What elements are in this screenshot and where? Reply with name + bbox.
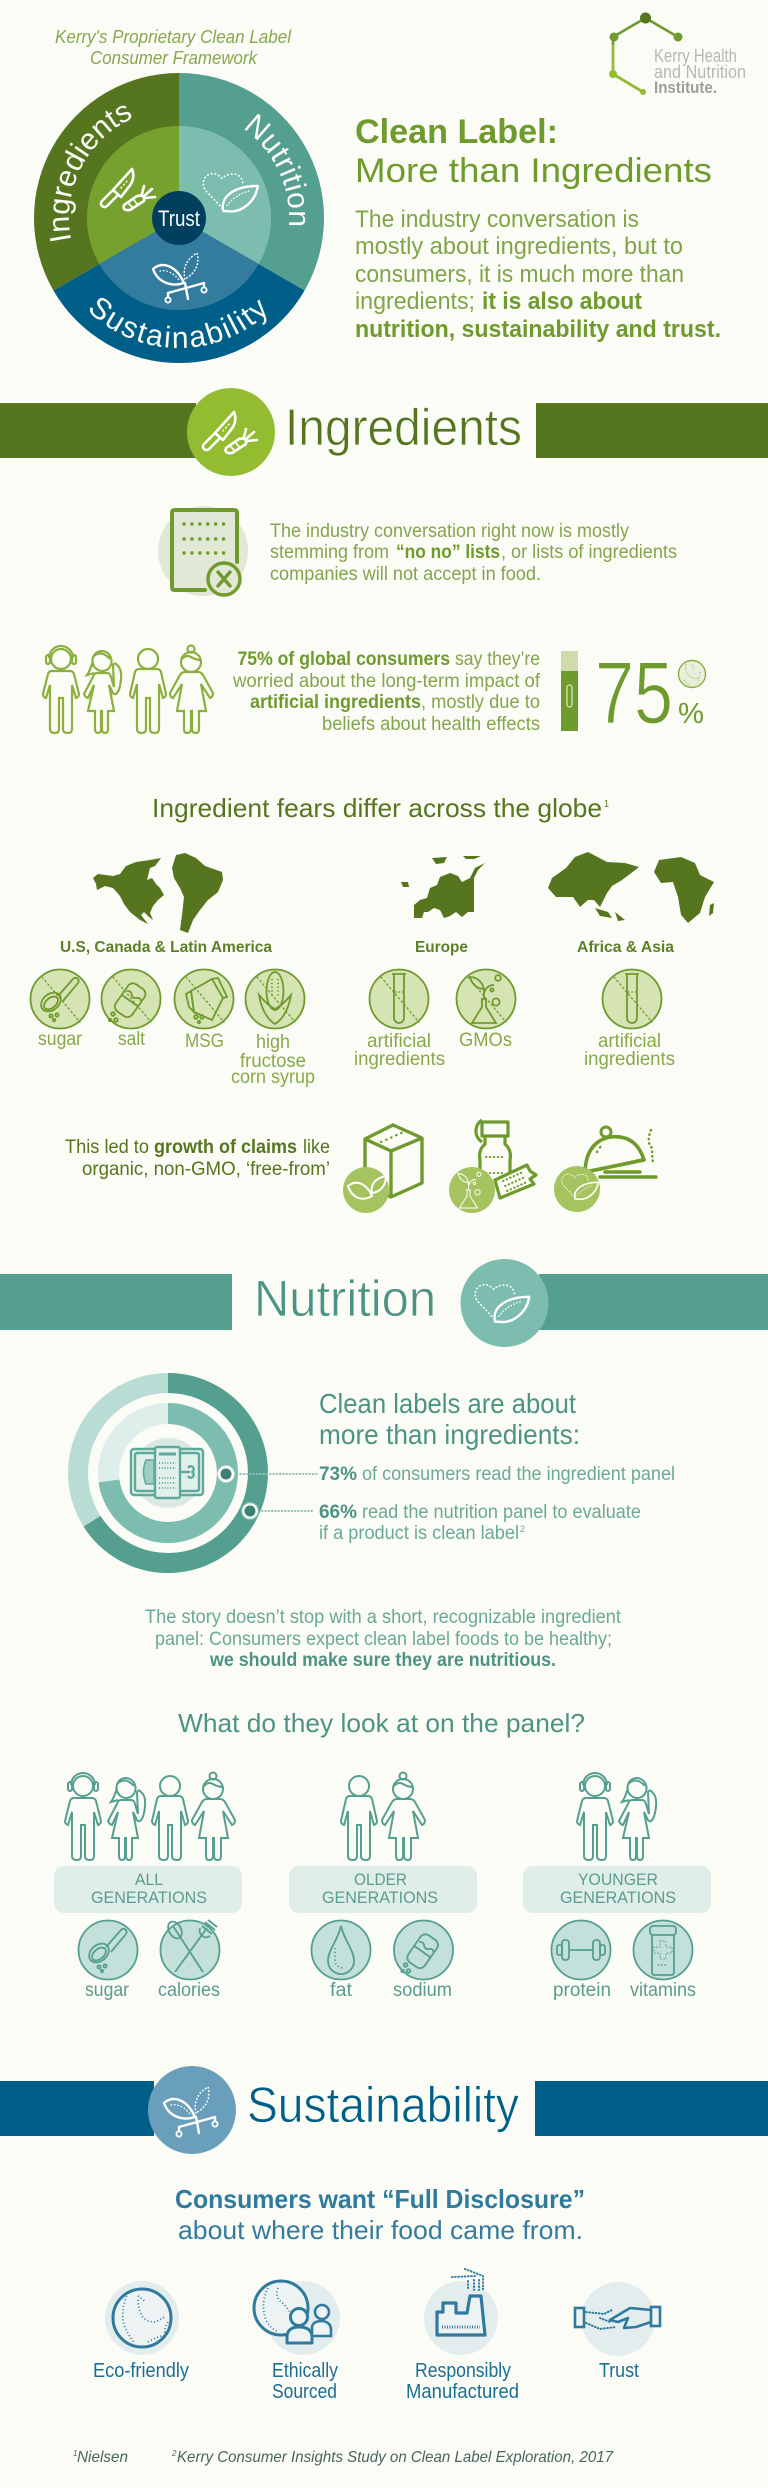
intro paragraph: [355, 206, 721, 343]
map: Americas: [93, 853, 223, 933]
ingredient fear labels: MSG: [185, 1031, 224, 1052]
heading: full disclosure: Consumers want “Full Disclosure”: [175, 2184, 585, 2214]
ingredient fear labels: GMOs: [459, 1030, 512, 1051]
ingredient fear labels: artificial: [367, 1031, 431, 1052]
group: younger generations: protein: [553, 1980, 611, 2001]
group: all generations: sugar: [85, 1980, 130, 2001]
intro paragraph: The industry conversation is: [355, 206, 639, 233]
framework caption: Consumer Framework: [90, 48, 258, 68]
no-no list text: [270, 521, 677, 585]
icon: trust handshake: [575, 2282, 660, 2356]
panel: sustainability: [0, 2066, 768, 2403]
nutrition banner: [0, 1259, 768, 1347]
ingredient fear labels: high: [256, 1032, 290, 1053]
ingredient fear icons: [30, 970, 662, 1028]
sustainability labels: Responsibly: [415, 2360, 511, 2382]
story paragraph: [145, 1607, 622, 1671]
ingredient fear labels: ingredients: [584, 1049, 675, 1070]
framework wheel: Ingredients: [50, 106, 132, 242]
heading: clean labels: [319, 1388, 580, 1450]
ingredient fear labels: sugar: [38, 1029, 83, 1050]
framework caption: Kerry's Proprietary Clean Label: [55, 27, 292, 47]
panel: header: [34, 12, 746, 363]
heading: clean labels: more than ingredients:: [319, 1419, 580, 1450]
sustainability labels: Trust: [599, 2360, 639, 2382]
claims text: organic, non-GMO, ‘free-from’: [82, 1159, 330, 1180]
icon: ethically sourced: [254, 2281, 340, 2355]
nutrition banner: Nutrition: [254, 1270, 436, 1327]
group: older generations: GENERATIONS: [322, 1888, 438, 1907]
75% text: say they’re: [455, 649, 540, 670]
ingredient fear labels: [38, 1029, 675, 1088]
heading: full disclosure: [175, 2184, 585, 2245]
title: [355, 113, 712, 190]
no-no list text: The industry conversation right now is mostly: [270, 521, 629, 542]
sustainability labels: Eco-friendly: [93, 2360, 189, 2382]
ingredient fear labels: corn syrup: [231, 1067, 315, 1088]
intro paragraph: ingredients;: [355, 288, 475, 315]
sustainability banner: [0, 2066, 768, 2154]
icon: organic box: [343, 1125, 422, 1213]
footnotes: 1: [73, 2449, 77, 2458]
claims text: growth of claims: [154, 1137, 297, 1158]
75% text: [232, 649, 541, 735]
heading: ingredient fears: Ingredient fears differ across the globe: [152, 793, 602, 823]
stat: 73% and 66%: of consumers read the ingredient panel: [362, 1464, 675, 1485]
75% text: 75% of global consumers: [238, 649, 450, 670]
group: older generations: fat: [330, 1980, 353, 2001]
75% text: beliefs about health effects: [322, 714, 540, 735]
region labels: U.S, Canada & Latin America: [60, 939, 272, 956]
ingredients banner: Ingredients: [285, 399, 522, 457]
logo: and Nutrition: [654, 62, 746, 82]
heading: ingredient fears: 1: [604, 799, 609, 810]
sustainability labels: Manufactured: [406, 2381, 519, 2403]
stat: 73% and 66%: read the nutrition panel to evaluate: [362, 1502, 641, 1523]
stat: 73% and 66%: if a product is clean label: [319, 1523, 519, 1544]
icon: no-no list: [158, 506, 248, 596]
region labels: Europe: [415, 939, 468, 956]
icon: eco-friendly: [105, 2281, 179, 2355]
75% text: , mostly due to: [421, 692, 540, 713]
75% text: worried about the long-term impact of: [232, 671, 541, 692]
no-no list text: companies will not accept in food.: [270, 564, 541, 585]
ingredients banner: [0, 388, 768, 476]
75% stat: %: [678, 698, 704, 730]
ingredient fear labels: fructose: [240, 1051, 306, 1072]
map: Europe: [401, 856, 485, 918]
intro paragraph: consumers, it is much more than: [355, 261, 684, 288]
ingredient fear labels: salt: [118, 1029, 146, 1050]
claims text: This led to: [65, 1137, 149, 1158]
title: More than Ingredients: [355, 152, 712, 190]
logo: [609, 12, 746, 97]
map: Africa and Asia: [548, 852, 714, 923]
ingredient fear labels: artificial: [598, 1031, 661, 1052]
no-no list text: stemming from: [270, 542, 389, 563]
icon: four consumers: [43, 646, 213, 733]
heading: clean labels: Clean labels are about: [319, 1388, 576, 1419]
story paragraph: The story doesn’t stop with a short, recognizable ingredient: [145, 1607, 622, 1628]
group: older generations: OLDER: [354, 1870, 407, 1889]
75% stat: 75: [595, 643, 673, 742]
stat: 73% and 66%: 2: [520, 1524, 525, 1534]
group: all generations: [54, 1772, 242, 2001]
group: older generations: [289, 1772, 477, 2001]
heading: full disclosure: about where their food came from.: [178, 2215, 583, 2245]
framework wheel: Trust: [158, 206, 200, 231]
logo: Kerry Health: [654, 46, 737, 66]
stat: 73% and 66%: 66%: [319, 1502, 357, 1523]
sustainability labels: [93, 2360, 639, 2403]
75% text: artificial ingredients: [250, 692, 421, 713]
intro paragraph: mostly about ingredients, but to: [355, 233, 683, 260]
framework wheel: Nutrition: [244, 114, 307, 226]
donut chart: label readership: [78, 1383, 318, 1563]
claims text: [65, 1137, 330, 1180]
75% gauge: [561, 651, 578, 731]
region labels: [60, 939, 674, 956]
intro paragraph: it is also about: [482, 288, 642, 315]
logo: Institute.: [654, 78, 717, 97]
title: Clean Label:: [355, 113, 558, 151]
footnotes: 2: [171, 2449, 177, 2458]
panel: ingredients: [0, 388, 768, 1213]
framework wheel: [34, 73, 324, 363]
group: younger generations: YOUNGER: [578, 1870, 658, 1889]
footnotes: Nielsen: [77, 2449, 128, 2466]
icon: non-GMO bottle and bar: [449, 1120, 536, 1213]
story paragraph: we should make sure they are nutritious.: [209, 1650, 556, 1671]
group: younger generations: [523, 1773, 711, 2001]
group: all generations: GENERATIONS: [91, 1888, 207, 1907]
no-no list text: “no no” lists: [396, 542, 500, 563]
story paragraph: panel: Consumers expect clean label foods to be healthy;: [155, 1629, 612, 1650]
no-no list text: , or lists of ingredients: [501, 542, 677, 563]
claims text: like: [303, 1137, 330, 1158]
heading: what do they look at: What do they look at on the panel?: [178, 1708, 585, 1738]
group: all generations: ALL: [135, 1870, 163, 1889]
intro paragraph: nutrition, sustainability and trust.: [355, 316, 721, 343]
ingredient fear labels: ingredients: [354, 1049, 445, 1070]
group: younger generations: vitamins: [630, 1980, 696, 2001]
sustainability banner: Sustainability: [247, 2077, 519, 2133]
group: younger generations: GENERATIONS: [560, 1888, 676, 1907]
icon: responsibly manufactured: [424, 2269, 498, 2355]
stat: 73% and 66%: 73%: [319, 1464, 357, 1485]
panel: nutrition: [0, 1259, 768, 2001]
framework wheel: Sustainability: [90, 298, 266, 348]
icon: free-from cloche: [554, 1127, 656, 1212]
framework caption: [55, 27, 292, 68]
stat: 73% and 66%: [319, 1464, 675, 1544]
sustainability labels: Ethically: [272, 2360, 338, 2382]
footnotes: Kerry Consumer Insights Study on Clean Label Exploration, 2017: [177, 2449, 614, 2466]
group: all generations: calories: [158, 1980, 220, 2001]
group: older generations: sodium: [393, 1980, 452, 2001]
region labels: Africa & Asia: [577, 939, 674, 956]
sustainability labels: Sourced: [272, 2381, 337, 2403]
